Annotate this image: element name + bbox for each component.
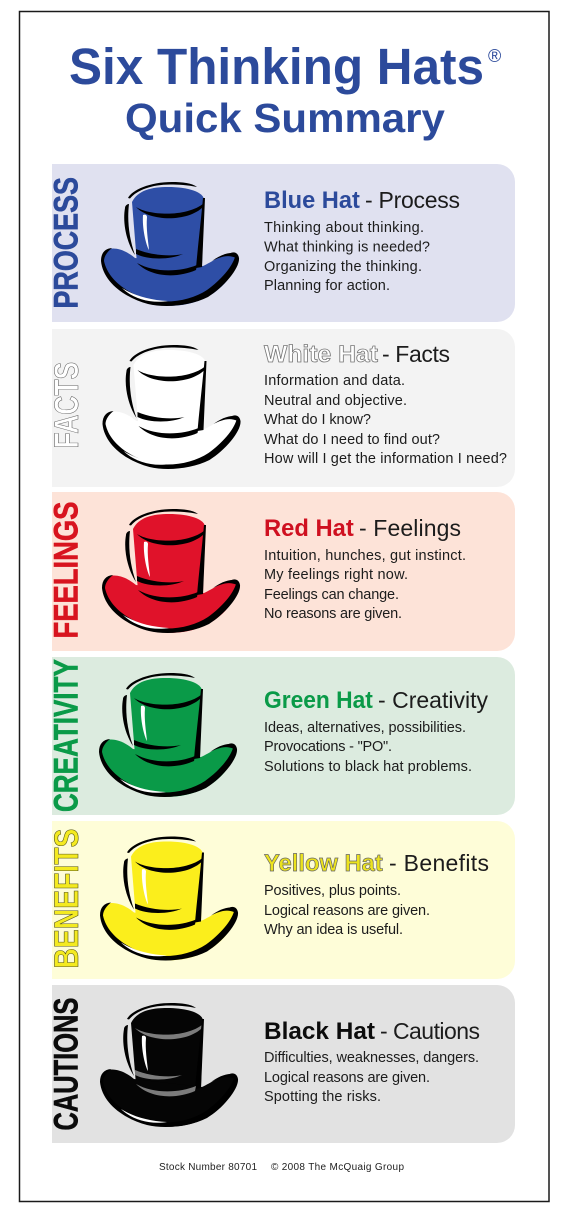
side label: creativity: CREATIVITY xyxy=(48,659,85,812)
icon: black hat xyxy=(100,1003,238,1127)
panel: red hat xyxy=(47,492,515,651)
footer xyxy=(159,1162,404,1173)
icon: yellow hat xyxy=(100,836,238,960)
title: Six Thinking Hats xyxy=(69,38,484,95)
footer: © 2008 The McQuaig Group xyxy=(271,1162,404,1173)
heading: Green Hat xyxy=(264,686,373,713)
description: Neutral and objective. xyxy=(264,393,407,409)
panel background xyxy=(52,329,515,487)
panel: white hat xyxy=(48,329,515,487)
heading: - Facts xyxy=(382,341,450,367)
side label: facts: FACTS xyxy=(48,362,86,448)
panel: green hat xyxy=(48,657,515,815)
description: Provocations - "PO". xyxy=(264,739,392,755)
description xyxy=(264,548,466,622)
icon: white hat xyxy=(102,345,241,469)
description: Organizing the thinking. xyxy=(264,259,422,275)
title xyxy=(69,38,501,141)
description: How will I get the information I need? xyxy=(264,451,507,467)
side label: process: PROCESS xyxy=(48,177,85,308)
side label: cautions: CAUTIONS xyxy=(48,998,85,1130)
description: Intuition, hunches, gut instinct. xyxy=(264,548,466,564)
description: Difficulties, weaknesses, dangers. xyxy=(264,1050,479,1066)
description xyxy=(264,373,507,467)
title: Quick Summary xyxy=(125,94,445,141)
heading xyxy=(264,341,450,368)
heading xyxy=(264,187,460,214)
title: ® xyxy=(488,46,501,66)
panel background xyxy=(52,657,515,815)
footer: Stock Number 80701 xyxy=(159,1162,257,1173)
description xyxy=(264,720,472,775)
description xyxy=(264,220,430,294)
description: Logical reasons are given. xyxy=(264,903,430,919)
side label: benefits: BENEFITS xyxy=(48,829,86,968)
icon: blue hat xyxy=(101,182,239,306)
heading xyxy=(264,686,488,713)
heading: - Process xyxy=(365,187,460,213)
description: Logical reasons are given. xyxy=(264,1070,430,1086)
heading: Black Hat xyxy=(264,1018,375,1045)
description: What do I know? xyxy=(264,412,371,428)
side label: feelings: FEELINGS xyxy=(47,502,85,638)
description: What thinking is needed? xyxy=(264,240,430,256)
description: My feelings right now. xyxy=(264,567,408,583)
icon: red hat xyxy=(102,509,240,633)
description: Positives, plus points. xyxy=(264,883,401,899)
description xyxy=(264,1050,479,1105)
heading: White Hat xyxy=(264,341,378,368)
description xyxy=(264,883,430,938)
panel background xyxy=(52,985,515,1143)
heading xyxy=(264,515,461,542)
description: Feelings can change. xyxy=(264,587,399,603)
panel background xyxy=(52,821,515,979)
description: Ideas, alternatives, possibilities. xyxy=(264,720,466,736)
panel background xyxy=(52,492,515,651)
panel: yellow hat xyxy=(48,821,515,979)
description: Spotting the risks. xyxy=(264,1089,381,1105)
heading: Red Hat xyxy=(264,515,354,542)
description: Why an idea is useful. xyxy=(264,922,403,938)
heading xyxy=(264,1018,480,1045)
icon: green hat xyxy=(99,673,237,797)
heading: - Benefits xyxy=(389,850,489,876)
panel background xyxy=(52,164,515,322)
description: What do I need to find out? xyxy=(264,432,440,448)
heading xyxy=(264,850,489,877)
description: Thinking about thinking. xyxy=(264,220,424,236)
description: Information and data. xyxy=(264,373,405,389)
heading: Yellow Hat xyxy=(264,850,383,877)
heading: - Creativity xyxy=(378,687,488,713)
description: Planning for action. xyxy=(264,278,390,294)
description: Solutions to black hat problems. xyxy=(264,759,472,775)
panel: black hat xyxy=(48,985,515,1143)
heading: - Feelings xyxy=(359,515,461,541)
panel: blue hat xyxy=(48,164,515,322)
heading: - Cautions xyxy=(380,1018,480,1044)
description: No reasons are given. xyxy=(264,606,402,622)
heading: Blue Hat xyxy=(264,187,360,214)
